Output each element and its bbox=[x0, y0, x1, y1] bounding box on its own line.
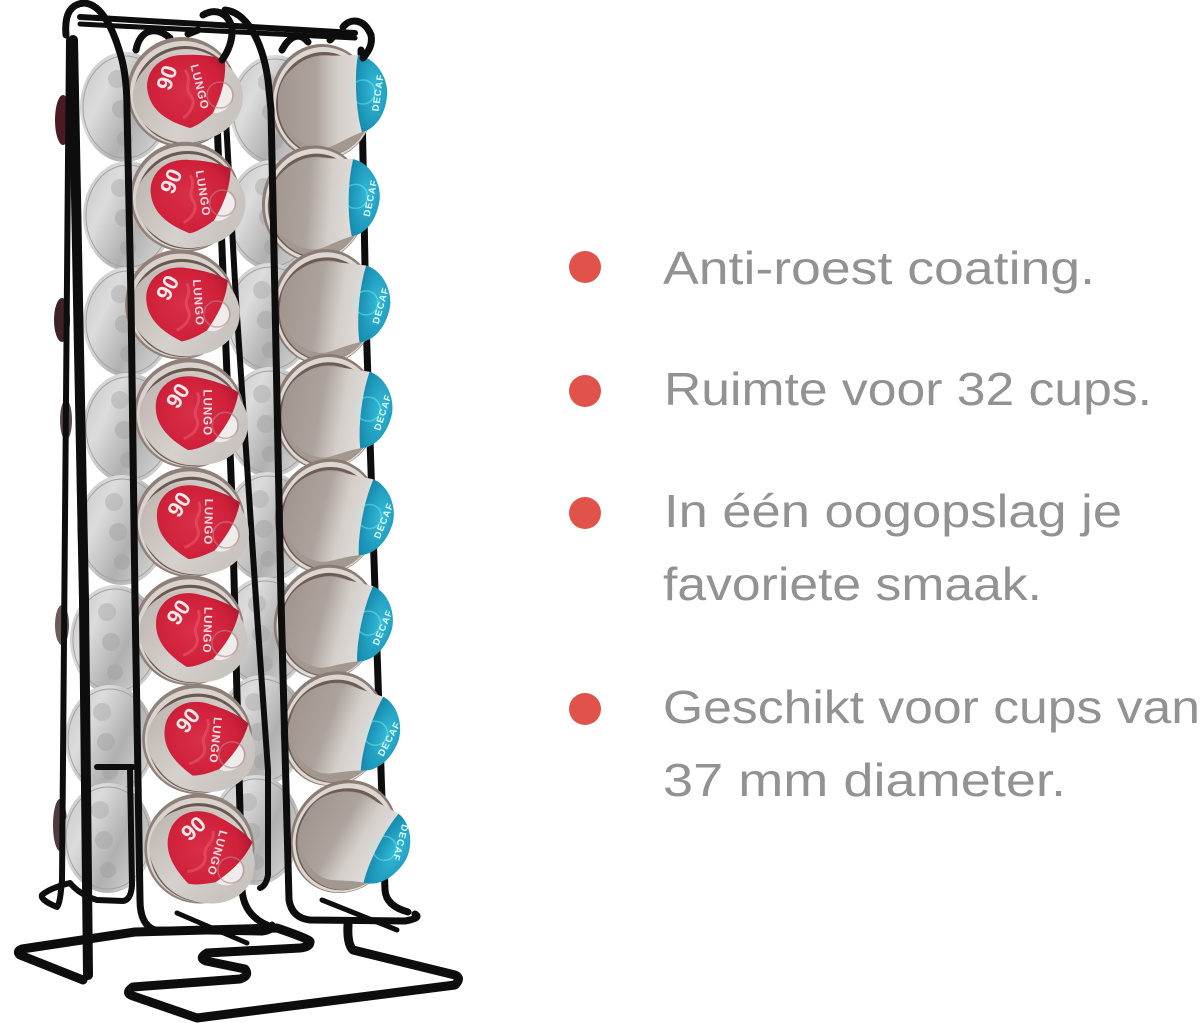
capsule: Lungo row 4 bbox=[122, 347, 262, 481]
capsule: Lungo row 1 bbox=[127, 37, 243, 147]
capsule: Decaf row 3 bbox=[265, 242, 397, 374]
capsule: Decaf row 5: DECAF bbox=[372, 501, 396, 540]
capsule: Lungo row 3: LUNGO bbox=[190, 279, 205, 326]
capsule: Decaf row 7 bbox=[265, 656, 415, 805]
bullet: overview: favoriete smaak. bbox=[663, 558, 1042, 610]
capsule: Lungo row 1: 90 bbox=[151, 62, 183, 93]
capsule: Lungo row 6: 90 bbox=[161, 595, 196, 629]
capsule: Lungo row 3 bbox=[116, 241, 250, 369]
capsule: Lungo row 3: 90 bbox=[151, 271, 184, 304]
capsule: Lungo row 5: 90 bbox=[162, 487, 196, 522]
capsule: Lungo row 5: LUNGO bbox=[201, 499, 214, 545]
bullet: anti-rust: Anti-roest coating. bbox=[663, 242, 1095, 294]
capsule: Lungo row 8: 90 bbox=[176, 811, 211, 846]
back row capsules, left and right bbox=[53, 52, 320, 893]
capsule: Decaf row 2 bbox=[258, 142, 383, 266]
capsule: Decaf row 2: DECAF bbox=[362, 179, 380, 218]
bullet: overview: In één oogopslag je bbox=[664, 485, 1122, 537]
capsule: Decaf row 1: DECAF bbox=[370, 73, 387, 112]
capsule: Lungo row 2 bbox=[125, 137, 251, 257]
capsule: Decaf row 8 bbox=[270, 760, 429, 919]
capsule: Lungo row 4: LUNGO bbox=[201, 390, 213, 436]
blue Decaf capsules column bbox=[258, 44, 429, 919]
capsule: Lungo row 8 bbox=[124, 773, 280, 927]
capsule: Decaf row 4: DECAF bbox=[372, 393, 394, 432]
capsule: Decaf row 6: DECAF bbox=[371, 608, 396, 647]
capsule: Decaf row 8: DECAF bbox=[390, 823, 410, 862]
capsule: Lungo row 7 bbox=[127, 668, 273, 812]
capsule: Lungo row 1: LUNGO bbox=[187, 63, 210, 111]
capsule: Lungo row 4: 90 bbox=[161, 379, 195, 413]
capsule: Lungo row 6: LUNGO bbox=[200, 607, 213, 654]
bullet: capacity: Ruimte voor 32 cups. bbox=[664, 363, 1152, 415]
capsule: Decaf row 6 bbox=[261, 553, 404, 695]
capsule: Lungo row 2: 90 bbox=[155, 165, 187, 197]
capsule: Decaf row 4 bbox=[265, 346, 400, 480]
capsule: Lungo row 7: 90 bbox=[170, 703, 205, 738]
bullet: compatibility: Geschikt voor cups van bbox=[663, 681, 1200, 733]
capsule: Decaf row 7: DECAF bbox=[376, 720, 403, 758]
capsule: Lungo row 2: LUNGO bbox=[193, 170, 212, 217]
capsule: Decaf row 5 bbox=[263, 447, 405, 588]
capsule: Lungo row 8: LUNGO bbox=[204, 829, 229, 877]
bullet: overview bbox=[569, 485, 1122, 610]
rack: back wires bbox=[42, 30, 408, 925]
bullet: compatibility: 37 mm diameter. bbox=[663, 754, 1066, 806]
feature list bbox=[569, 242, 1200, 806]
rack: front wires and arches bbox=[66, 3, 417, 975]
capsule: Lungo row 6 bbox=[121, 562, 263, 700]
capsule: Lungo row 5 bbox=[123, 455, 263, 591]
red Lungo capsules column bbox=[116, 37, 280, 927]
rack: base frame bbox=[18, 925, 459, 1018]
capsule: Decaf row 1 bbox=[270, 44, 387, 160]
capsule: Lungo row 7: LUNGO bbox=[206, 717, 223, 764]
capsule: Decaf row 3: DECAF bbox=[371, 286, 392, 325]
capsule rack bbox=[18, 3, 459, 1018]
bullet: compatibility bbox=[569, 681, 1200, 806]
